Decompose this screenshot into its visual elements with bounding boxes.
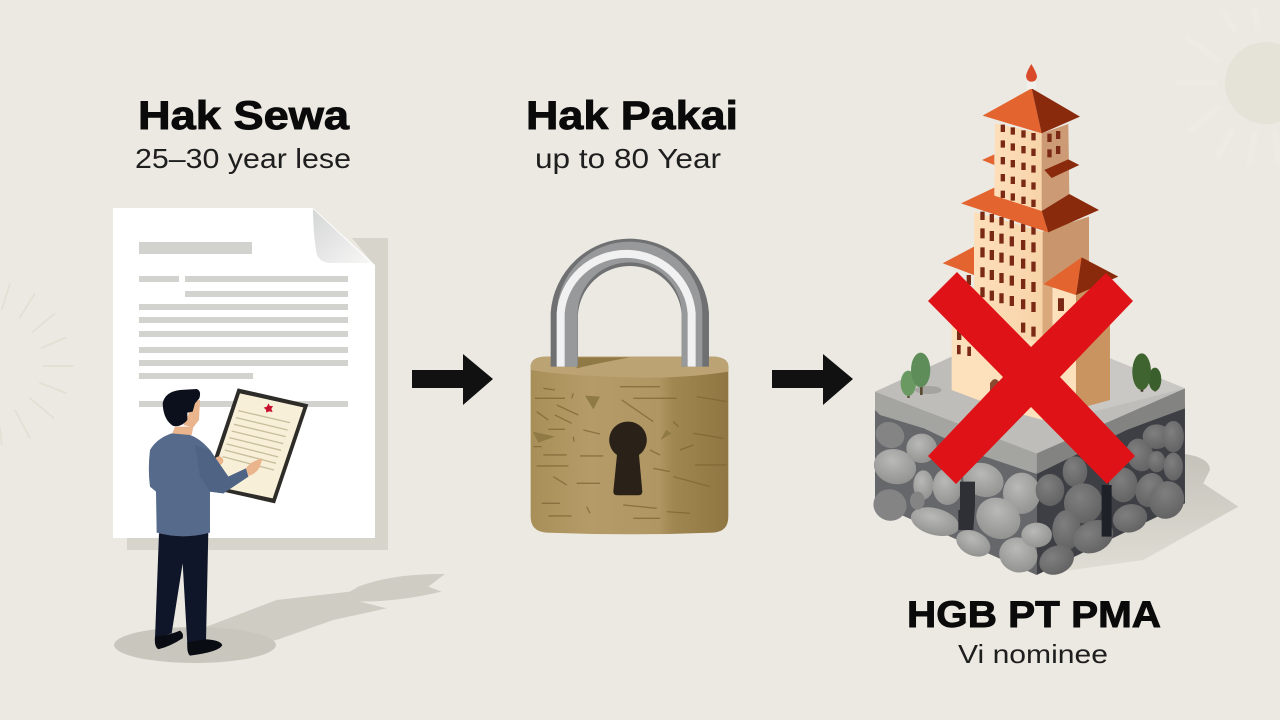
heading: Hak Sewa: Hak Sewa <box>138 94 350 138</box>
heading: Hak Sewa: 25–30 year lese <box>135 143 351 174</box>
heading: HGB PT PMA: HGB PT PMA <box>907 594 1161 635</box>
heading: HGB PT PMA: Vi nominee <box>958 639 1108 669</box>
decorative sun left <box>0 283 73 445</box>
person holding certificate <box>114 388 445 663</box>
tower middle section <box>974 212 1089 343</box>
heading: Hak Pakai: Hak Pakai <box>526 94 738 138</box>
building shadow <box>1060 453 1238 572</box>
tower lower wing walls <box>952 280 1110 420</box>
heading: HGB PT PMA <box>907 594 1161 669</box>
tower spire <box>1026 64 1037 89</box>
heading: Hak Pakai: up to 80 Year <box>535 143 721 174</box>
padlock <box>531 252 728 534</box>
red cross <box>928 272 1135 484</box>
document illustration <box>113 208 388 550</box>
tower <box>943 64 1118 420</box>
arrow 1 <box>412 354 493 405</box>
arrow 2 <box>772 354 853 405</box>
stone base <box>869 357 1189 580</box>
tower windows <box>957 125 1064 356</box>
heading: Hak Pakai <box>526 94 738 174</box>
trees <box>901 353 1161 398</box>
heading: Hak Sewa <box>135 94 351 174</box>
decorative sun right <box>1179 10 1280 163</box>
tower roofs <box>943 88 1118 295</box>
tower top section <box>994 123 1069 211</box>
